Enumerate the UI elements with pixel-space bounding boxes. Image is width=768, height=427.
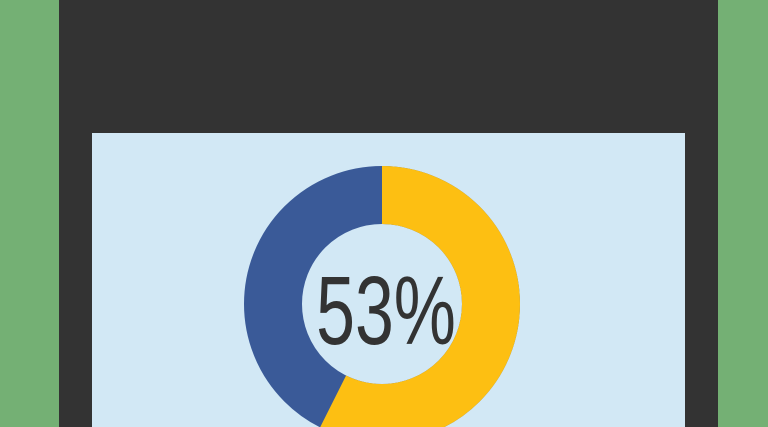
screen bbox=[92, 133, 685, 427]
percentage label: 53% bbox=[316, 256, 456, 365]
